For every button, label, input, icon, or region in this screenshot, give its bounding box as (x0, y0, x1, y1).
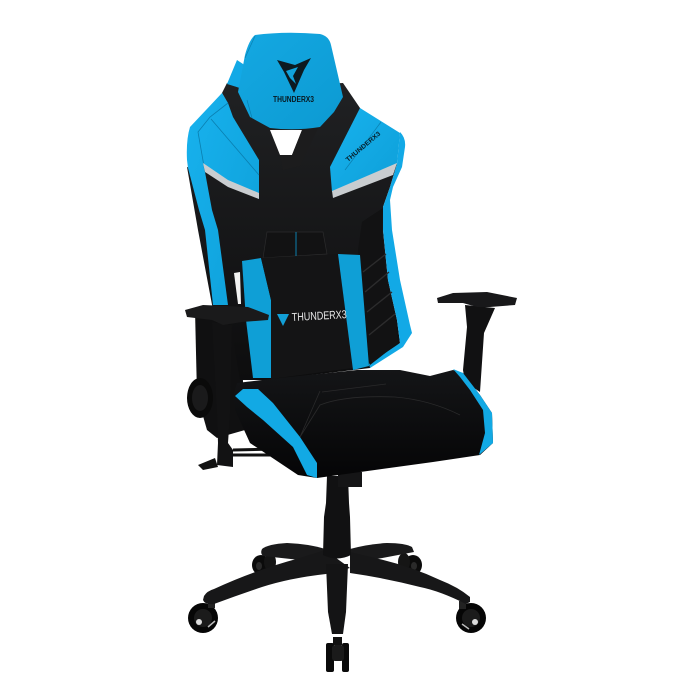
backrest black shell (187, 83, 400, 380)
left wing seam (198, 103, 259, 175)
left blue shell and strip (187, 93, 259, 305)
left arm pad (185, 305, 269, 325)
wing brand text: THUNDERX3 (345, 130, 383, 164)
right blue outer strip (369, 132, 412, 368)
pillow black centre (261, 254, 353, 379)
headrest cushion (238, 33, 343, 129)
lumbar pillow (242, 254, 369, 379)
left armrest (185, 305, 269, 467)
pillow brand text: THUNDERX3 (292, 309, 347, 324)
left silver stripe (203, 163, 259, 199)
gas lift column (323, 476, 351, 558)
seat centre seams (300, 384, 460, 437)
right front caster (456, 601, 486, 633)
seat cushion (233, 369, 493, 478)
seat left bolster (235, 389, 317, 478)
rear mechanism and recline disc (187, 310, 280, 470)
right wing panel (330, 108, 400, 192)
pillow logo (277, 314, 289, 326)
rear right arm (350, 543, 414, 559)
lower back panel (263, 232, 327, 258)
right arm pad (437, 292, 517, 307)
pillow left blue band (242, 258, 271, 378)
left arm column (212, 322, 233, 467)
headrest brand text: THUNDERX3 (273, 95, 314, 104)
rear left caster (252, 553, 276, 575)
seat tilt knob (338, 472, 362, 487)
right ribbed side panel (358, 208, 398, 365)
white gap beside pillow (234, 272, 241, 304)
neck opening (270, 130, 302, 155)
rear left arm (261, 543, 325, 560)
right arm column (463, 305, 495, 392)
right silver stripe (332, 163, 397, 198)
left front arm (203, 550, 350, 604)
seat right bolster (453, 369, 493, 455)
left top strip (227, 60, 246, 88)
casters and star base (188, 472, 486, 672)
right armrest (437, 292, 517, 392)
front arm (326, 564, 348, 634)
headrest logo (277, 58, 311, 93)
left front caster (188, 600, 218, 633)
right front arm (350, 552, 470, 604)
seat black body (233, 370, 493, 478)
backrest (187, 60, 412, 380)
pillow right blue band (338, 254, 369, 370)
neck strap (280, 128, 318, 170)
headrest (238, 33, 343, 170)
front caster (326, 637, 349, 672)
rear right caster (398, 553, 422, 575)
